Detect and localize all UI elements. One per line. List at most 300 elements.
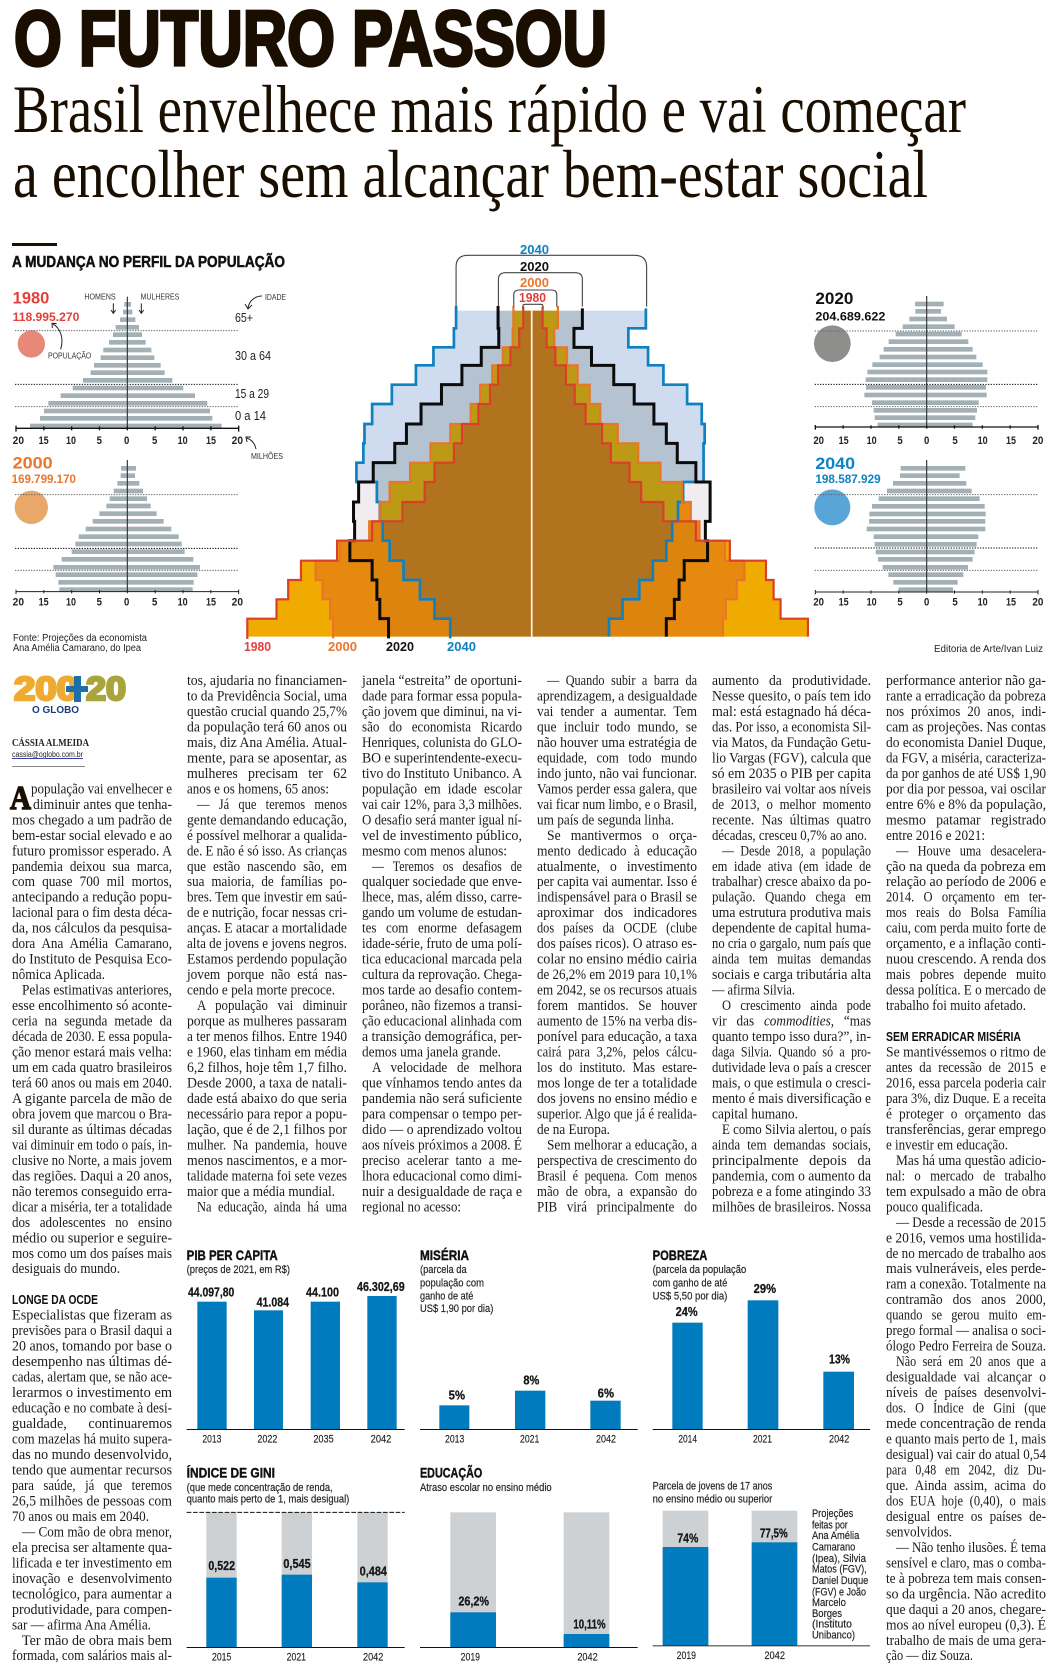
article column 5: pulação. Quando chega em <box>712 890 871 906</box>
year 2000: 2000 <box>13 455 53 473</box>
article column 5: décadas, cresceu 0,7% ao ano. <box>712 828 867 844</box>
article column 1: Pelas estimativas anteriores, <box>22 983 172 999</box>
article column 1: 20 anos, tomando por base o <box>12 1339 172 1355</box>
years: 2014 <box>678 1434 697 1446</box>
article column 6: mos ao nível europeu (0,3). É <box>886 1616 1046 1633</box>
axis labels 2000: 10 <box>66 597 76 609</box>
article column 3: preciso acelerar tanto a me- <box>362 1153 522 1169</box>
byline: CÁSSIA ALMEIDA <box>12 737 89 749</box>
article column 4: não houver uma estratégia de <box>537 735 697 751</box>
article column 4: em 2042, se os recursos atuais <box>537 983 697 999</box>
article column 5: mais, o que estimula o cresci- <box>712 1076 871 1092</box>
values: 74% <box>677 1532 698 1546</box>
chart: jovens no ensino médio ou superior <box>653 1480 870 1662</box>
article column 5: das. Por isso, a economista Sil- <box>712 719 871 735</box>
article column 1: dicar a miséria, ter a totalidade <box>12 1199 172 1215</box>
article column 3: gando um volume de estudan- <box>362 905 522 921</box>
bottom labels of central chart: 1980 <box>244 639 271 654</box>
article column 4: de na Europa. <box>537 1122 610 1138</box>
article column 1: gualdade, continuaremos <box>12 1416 172 1432</box>
article column 6: desigualdade vai alcançar o <box>886 1370 1046 1386</box>
article column 1: bem-estar social elevado e ao <box>12 828 172 844</box>
overlapping areas <box>247 311 808 637</box>
values <box>208 1557 387 1579</box>
article column 4: Brasil é pequena. Com menos <box>537 1168 697 1184</box>
article column 4: indo junto, não vai funcionar. <box>537 766 697 782</box>
bars <box>450 1512 609 1647</box>
axis labels 2040: 15 <box>839 597 849 609</box>
years: 2021 <box>287 1652 306 1664</box>
article column 2: necessário para repor a popu- <box>187 1106 347 1122</box>
note: projections: Borges <box>812 1608 842 1620</box>
article column 5: milhões de brasileiros. Nossa <box>712 1199 872 1215</box>
bars <box>672 1300 854 1429</box>
axis labels 2020: 20 <box>813 435 824 447</box>
values: 0,545 <box>283 1557 311 1571</box>
article column 4: forem mantidos. Se houver <box>537 998 697 1014</box>
article column 5: pandemia, com o aumento da <box>712 1168 872 1184</box>
axis labels 2040: 5 <box>952 597 958 609</box>
outline 2040 <box>356 306 705 638</box>
logo: 200+20 O Globo: 20 <box>86 670 126 707</box>
values: 10,11% <box>573 1617 606 1631</box>
article column 4: — Quando subir a barra da <box>546 673 698 689</box>
population 2020: 204.689.622 <box>815 310 886 324</box>
values: 24% <box>676 1305 698 1319</box>
article column 5 <box>711 673 872 1215</box>
note: projections: Camarano <box>812 1541 855 1553</box>
article column 1: ceria na segunda metade da <box>12 1014 173 1030</box>
axis labels 2000 <box>13 597 243 609</box>
article column 1: diminuir antes que tenha- <box>33 797 172 813</box>
article column 1: da, nos cálculos da pesquisa- <box>12 921 172 937</box>
axis labels 2020: 20 <box>1032 435 1043 447</box>
article column 6: orçamento, e a inflação conti- <box>886 936 1046 952</box>
article column 3: janela “estreita” de oportuni- <box>361 673 522 689</box>
chart: overlaid pyramids <box>247 255 808 639</box>
article column 4: aumento de 15% na verba dis- <box>537 1014 697 1030</box>
article column 1 <box>10 780 173 1664</box>
article column 1: dos adolescentes no ensino <box>12 1215 172 1231</box>
top labels of central chart: 1980 <box>519 290 546 305</box>
bottom labels of central chart: 2020 <box>386 639 414 654</box>
values <box>677 1527 788 1546</box>
article column 1: terá 60 anos ou mais em 2040. <box>12 1076 172 1092</box>
article column 6: senvolvidos. <box>886 1524 952 1540</box>
values: 5% <box>449 1389 465 1403</box>
chart: Pobreza <box>653 1247 870 1446</box>
note: projections: (Instituto <box>812 1618 852 1630</box>
article column 3: nuir a desigualdade de raça e <box>362 1184 522 1200</box>
article column 1: dora Ana Amélia Camarano, <box>12 936 172 952</box>
article column 1: não teremos conseguido erra- <box>12 1184 172 1200</box>
article column 1: ela precisa ser altamente qua- <box>12 1540 172 1556</box>
values: 44.097,80 <box>188 1286 234 1300</box>
note: projections: feitas por <box>812 1519 848 1531</box>
article column 5: via Matos, da Fundação Getu- <box>712 735 871 751</box>
article column 4: Sem melhorar a educação, a <box>547 1137 698 1153</box>
brackets <box>456 255 647 308</box>
age band labels: 15 a 29 <box>235 387 269 401</box>
article column 5: principalmente depois da <box>712 1153 872 1169</box>
credit: Editoria de Arte/Ivan Luiz <box>934 644 1043 655</box>
note: projections: (FGV) e João <box>812 1586 866 1598</box>
article column 3: mos tarde ao desafio contem- <box>362 983 522 999</box>
values: 26,2% <box>458 1594 489 1608</box>
article column 4: Vamos perder essa galera, que <box>537 781 697 797</box>
article column 3: porâneo, não fizemos a transi- <box>362 998 522 1014</box>
article column 1: lacional para o fim desta déca- <box>12 905 172 921</box>
article column 1: educação e no combate à desi- <box>12 1401 172 1417</box>
article column 5: Nesse quesito, o país tem ido <box>712 688 871 704</box>
article column 4: aprendizagem, a desigualdade <box>537 688 697 704</box>
panel: pyramid 2020 <box>813 290 1043 447</box>
age band labels <box>235 311 271 423</box>
legend: population arrow: POPULAÇÃO <box>48 351 92 361</box>
article column 4: cairá para 3,2%, pelos cálcu- <box>537 1044 697 1060</box>
article column 2: tos, ajudaria no financiamen- <box>187 673 347 689</box>
note: projections <box>812 1508 868 1642</box>
article column 2: a ter menos filhos. Entre 1940 <box>187 1029 347 1045</box>
years: 2021 <box>753 1434 772 1446</box>
article column 5: ainda tem demandas sociais, <box>712 1137 871 1153</box>
note: projections: Unibanco) <box>812 1630 855 1642</box>
article column 4: dos países da OCDE (clube <box>537 921 697 937</box>
source note <box>13 633 147 654</box>
subheading <box>187 1482 349 1506</box>
article column 4: que incluir todo mundo, se <box>537 719 697 735</box>
subheading: US$ 5,50 por dia) <box>653 1291 727 1303</box>
article column 5: ainda tem muitas demandas <box>712 952 871 968</box>
panel: pyramid 2000 <box>12 455 243 609</box>
article column 1: formada, com salários mais al- <box>12 1648 172 1664</box>
article column 3: dido — o aprendizado voltou <box>362 1122 522 1138</box>
article column 1: para saúde, já que teremos <box>12 1478 172 1494</box>
article column 1: lificada e ter investimento em <box>12 1555 172 1571</box>
article column 1: do Instituto de Pesquisa Eco- <box>12 952 172 968</box>
years <box>461 1652 598 1664</box>
legend: women: MULHERES <box>141 292 180 302</box>
subheading: ganho de até <box>420 1291 473 1303</box>
subheading <box>653 1264 746 1303</box>
article column 2: mais, diz Ana Amélia. Atual- <box>187 735 347 751</box>
article column 1: década de 2030. E essa popula- <box>12 1029 172 1045</box>
panel: pyramid 1980 <box>13 290 243 447</box>
subtitle <box>13 71 966 212</box>
article column 2: alta de jovens e jovens negros. <box>187 936 347 952</box>
article column 5: E como Silvia alertou, o país <box>722 1122 871 1138</box>
logo: 200+20 O Globo: 200 <box>14 670 78 707</box>
legend: millions: MILHÕES <box>251 451 283 461</box>
bars 2020 <box>864 302 987 427</box>
article column 3: demos uma janela grande. <box>362 1044 501 1060</box>
circle: population 1980 <box>18 330 45 358</box>
article column 1: produtividade, para compen- <box>12 1602 172 1618</box>
age band labels: 30 a 64 <box>235 349 271 363</box>
article column 6: é proteger o orçamento das <box>886 1106 1046 1122</box>
chart: Índice de Gini <box>187 1464 405 1664</box>
article column 4: ponível para educação, a taxa <box>537 1029 698 1045</box>
article column 5: daga Silvia. Quando só a pro- <box>712 1044 871 1060</box>
axis labels 1980: 15 <box>206 435 216 447</box>
article column 1: inovação e desenvolvimento <box>12 1571 172 1587</box>
outline 2000 <box>316 306 744 638</box>
bars 2000 <box>53 466 200 592</box>
article column 2 <box>186 673 348 1215</box>
axis labels 1980: 0 <box>124 435 129 447</box>
article column 2: — Já que teremos menos <box>196 797 347 813</box>
bottom labels of central chart: 2000 <box>328 639 357 654</box>
article column 5: em idade ativa (em idade de <box>712 859 871 875</box>
note: projections: Daniel Duque <box>812 1575 868 1587</box>
axis labels 2000: 20 <box>232 597 243 609</box>
years: 2042 <box>829 1434 849 1446</box>
note: projections: Ana Amélia <box>812 1530 860 1542</box>
axis labels 2040: 15 <box>1006 597 1016 609</box>
year 2040: 2040 <box>815 455 855 473</box>
values: 29% <box>754 1282 776 1296</box>
axis labels 2020: 10 <box>978 435 988 447</box>
axis labels 2020: 10 <box>867 435 877 447</box>
axis labels 2000: 15 <box>206 597 216 609</box>
article column 5: mal: está estagnado há déca- <box>712 704 871 720</box>
article column 2: bres. Tem que investir em saú- <box>187 890 347 906</box>
axis labels 1980: 20 <box>13 435 24 447</box>
article column 3: vel de investimento público, <box>362 828 522 844</box>
article column 3: população em idade escolar <box>362 781 522 797</box>
subheading: (preços de 2021, em R$) <box>187 1264 290 1276</box>
article column 6: nuou crescendo. A renda dos <box>886 952 1046 968</box>
article column 1: desempenho nas últimas dé- <box>12 1354 172 1370</box>
article column 6: relação ao período de 2006 e <box>886 874 1046 890</box>
article column 1: — Com mão de obra menor, <box>21 1524 172 1540</box>
bars 1980 <box>30 302 222 428</box>
article column 5: trabalhar) cresce abaixo da po- <box>712 874 871 890</box>
population 2040: 198.587.929 <box>815 472 881 486</box>
article column 3: são do economista Ricardo <box>362 719 522 735</box>
axis labels 2020 <box>813 435 1043 447</box>
axis labels 2000: 5 <box>152 597 157 609</box>
years <box>678 1434 849 1446</box>
axis labels 2020: 5 <box>897 435 903 447</box>
article column 2: mente, para se aposentar, as <box>187 750 347 766</box>
article column 3: lhora educacional como dimi- <box>362 1168 522 1184</box>
subheading: US$ 1,90 por dia) <box>420 1303 493 1315</box>
article column 4: equidade, com todo mundo <box>537 750 697 766</box>
article column 3: cultura da reprovação. Chega- <box>362 967 522 983</box>
article column 6: trabalho foi muito afetado. <box>886 998 1026 1014</box>
section heading: population profile: A MUDANÇA NO PERFIL DA POPULAÇÃO <box>12 253 285 271</box>
article column 1: esse encolhimento só aconte- <box>12 998 172 1014</box>
subheading: Atraso escolar no ensino médio <box>420 1482 552 1494</box>
panel: pyramid 2040 <box>813 455 1043 609</box>
years: 2042 <box>577 1652 598 1664</box>
article column 2: anças. E atacar a mortalidade <box>187 921 347 937</box>
article column 3: Henriques, colunista do GLO- <box>362 735 522 751</box>
article column 2: to da Previdência Social, uma <box>187 688 348 704</box>
population 1980: 118.995.270 <box>13 310 80 324</box>
article column 6: entre 6% e 8% da população, <box>886 797 1046 813</box>
article column 5: vir das commodities, “mas <box>712 1014 871 1030</box>
article column 4: los do instituto. Mas estare- <box>537 1060 697 1076</box>
article column 1: com mazelas há muito supera- <box>12 1432 172 1448</box>
article column 3: pandemia não será suficiente <box>362 1091 522 1107</box>
article column 1: das regiões. Daqui a 20 anos, <box>12 1168 172 1184</box>
axis labels 2020: 15 <box>839 435 849 447</box>
article column 3: aos níveis próximos a 2008. É <box>362 1136 522 1153</box>
years: 2021 <box>520 1434 539 1446</box>
article column 2: que estão nascendo são, em <box>187 859 347 875</box>
axis labels 1980: 5 <box>97 435 102 447</box>
byline: cassia@oglobo.com.br <box>12 750 83 759</box>
article column 2: da população terá 60 anos ou <box>187 719 347 735</box>
year 2020: 2020 <box>815 290 853 308</box>
axis labels 2020: 15 <box>1006 435 1016 447</box>
article column 3: idade-série, fruto de uma polí- <box>362 936 522 952</box>
article column 2: de e nutrição, focar nessas cri- <box>187 905 347 921</box>
article column 1: um em cada quatro brasileiros <box>12 1060 172 1076</box>
circle: population 2020 <box>814 325 851 362</box>
article column 3: lhece, mas, além disso, carre- <box>362 890 522 906</box>
article column 6: so da urgência. Não acredito <box>886 1586 1046 1602</box>
outline 1980 <box>247 307 808 639</box>
article column 5: dutividade leva o país a crescer <box>712 1060 871 1076</box>
article column 5: dependente de capital huma- <box>712 921 871 937</box>
years <box>445 1434 616 1446</box>
note: projections: Projeções <box>812 1508 854 1520</box>
article column 1: clusive no Norte, a mais jovem <box>12 1153 172 1169</box>
axis labels 2040: 5 <box>897 597 903 609</box>
article column 2: dade está abaixo do que seria <box>187 1091 348 1107</box>
article column 4: mento dedicado à educação <box>537 843 697 859</box>
note: projections: Marcelo <box>812 1597 846 1609</box>
article column 1: ção menor estará mais velha: <box>12 1044 172 1060</box>
article column 2: gente demandando educação, <box>187 812 347 828</box>
article column 4: mão de obra, a expansão do <box>537 1184 697 1200</box>
drop cap: A <box>10 780 31 817</box>
article column 1: antecipando a redução popu- <box>12 890 172 906</box>
axis labels 1980: 15 <box>39 435 49 447</box>
article column 6: mais vulneráveis, eles perde- <box>886 1261 1046 1277</box>
article column 1: tendo que aumentar recursos <box>12 1462 172 1478</box>
article column 2: é possível melhorar a qualida- <box>187 828 347 844</box>
article column 3: ção educacional alinhada com <box>362 1014 522 1030</box>
article column 1: nômica Aplicada. <box>12 967 105 983</box>
years: 2035 <box>313 1434 334 1446</box>
article column 2: Desde 2000, a taxa de natali- <box>187 1076 347 1092</box>
logo: 200+20 O Globo <box>14 670 126 716</box>
article column 4: de 26,2% em 2019 para 10,1% <box>537 967 697 983</box>
years: 2019 <box>677 1650 696 1662</box>
article column 5: pobreza e a fome atingindo 33 <box>712 1184 871 1200</box>
axis labels 2000: 10 <box>178 597 188 609</box>
article column 4: per capita vai aumentar. Isso é <box>537 874 697 890</box>
years: 2013 <box>202 1434 221 1446</box>
article column 6: mesmo patamar registrado <box>886 812 1046 828</box>
article column 4: vai ficar num limbo, e o Brasil, <box>537 797 697 813</box>
axis labels 1980: 10 <box>66 435 76 447</box>
axis labels 2040: 20 <box>1032 597 1043 609</box>
years: 2042 <box>363 1652 383 1664</box>
article column 5: lio Vargas (FGV), calcula que <box>712 750 871 766</box>
values <box>676 1282 850 1366</box>
axis labels 2040: 0 <box>924 597 929 609</box>
article column 6: contramão dos anos 2000, <box>886 1292 1046 1308</box>
article column 5: uma estrutura produtiva mais <box>712 905 871 921</box>
article column 5: recente. Nas últimas quatro <box>712 812 871 828</box>
years <box>212 1652 383 1664</box>
article column 1: pandemia deixou sua marca, <box>12 859 172 875</box>
axis labels 2000: 20 <box>13 597 24 609</box>
source note: Fonte: Projeções da economista <box>13 633 147 644</box>
article column 2: 6,2 filhos, hoje têm 1,7 filho. <box>187 1060 347 1076</box>
article column 5: mento é mais diversificação e <box>712 1091 871 1107</box>
article column 3: ção jovem que diminui, na vi- <box>362 704 522 720</box>
article column 3: BO e superintendente-execu- <box>362 750 522 766</box>
article column 1: cadas, alertam que, se não ace- <box>12 1370 172 1386</box>
values: 41.084 <box>257 1295 289 1309</box>
note: projections: Matos (FGV), <box>812 1564 867 1576</box>
logo: 200+20 O Globo: O GLOBO <box>32 704 79 716</box>
article column 6: cam as projeções. Nas contas <box>886 719 1046 735</box>
article column 6: Mas há uma questão adicio- <box>896 1153 1046 1169</box>
year 1980: 1980 <box>13 290 49 308</box>
subheading: Longe da OCDE: LONGE DA OCDE <box>12 1292 98 1307</box>
article column 6 <box>886 673 1047 1664</box>
article column 5: quanto tempo isso dura?”, in- <box>712 1029 871 1045</box>
chart: Educação <box>420 1463 638 1664</box>
article column 1: 70 anos ou mais em 2040. <box>12 1509 149 1525</box>
article column 5: só em 2035 o PIB per capita <box>712 766 872 782</box>
article column 1: desiguais do mundo. <box>12 1261 120 1277</box>
article column 3: a transição demográfica, per- <box>362 1029 522 1045</box>
article column 4: vai tender a aumentar. Tem <box>537 704 697 720</box>
chart: PIB per capita <box>187 1247 405 1446</box>
years: 2042 <box>371 1434 391 1446</box>
article column 1: das no mundo desenvolvido, <box>12 1447 172 1463</box>
article column 2: Estamos perdendo população <box>187 952 347 968</box>
years: 2042 <box>596 1434 616 1446</box>
article column 1: 26,5 milhões de pessoas com <box>12 1493 172 1509</box>
article column 6: por dia por pessoa, vai oscilar <box>886 781 1046 797</box>
article column 3: tes com enorme defasagem <box>362 921 522 937</box>
article column 6: que daqui a 20 anos, chegare- <box>886 1602 1046 1618</box>
axis labels 1980: 5 <box>152 435 157 447</box>
legend: women <box>139 292 180 313</box>
article column 5: capital humano. <box>712 1106 798 1122</box>
article column 2: sua maioria, de famílias po- <box>187 874 347 890</box>
article column 1: população vai envelhecer e <box>31 781 172 797</box>
axis labels 1980 <box>13 435 243 447</box>
axis labels 1980: 20 <box>232 435 243 447</box>
axis labels 2000: 15 <box>39 597 49 609</box>
years <box>202 1434 391 1446</box>
article column 2: e 1960, elas tinham em média <box>187 1044 348 1060</box>
values: 6% <box>598 1387 614 1401</box>
years: 2013 <box>445 1434 464 1446</box>
subheading: quanto mais perto de 1, mais desigual) <box>187 1494 349 1506</box>
article column 2: cendo e pela morte precoce. <box>187 983 335 999</box>
article column 5: no cria o gargalo, num país que <box>712 936 871 952</box>
article column 3: — Teremos os desafios de <box>371 859 522 875</box>
legend: men: HOMENS <box>84 292 116 302</box>
top labels of central chart: 2040 <box>520 242 549 257</box>
subheading: Parcela de jovens de 17 anos <box>653 1480 773 1492</box>
article column 2: de. E não é só isso. As crianças <box>187 843 347 859</box>
article column 1: mos como um dos países mais <box>12 1246 172 1262</box>
article column 2: lação, que é de 2,1 filhos por <box>187 1122 347 1138</box>
article column 1: Ter mão de obra mais bem <box>22 1633 172 1649</box>
